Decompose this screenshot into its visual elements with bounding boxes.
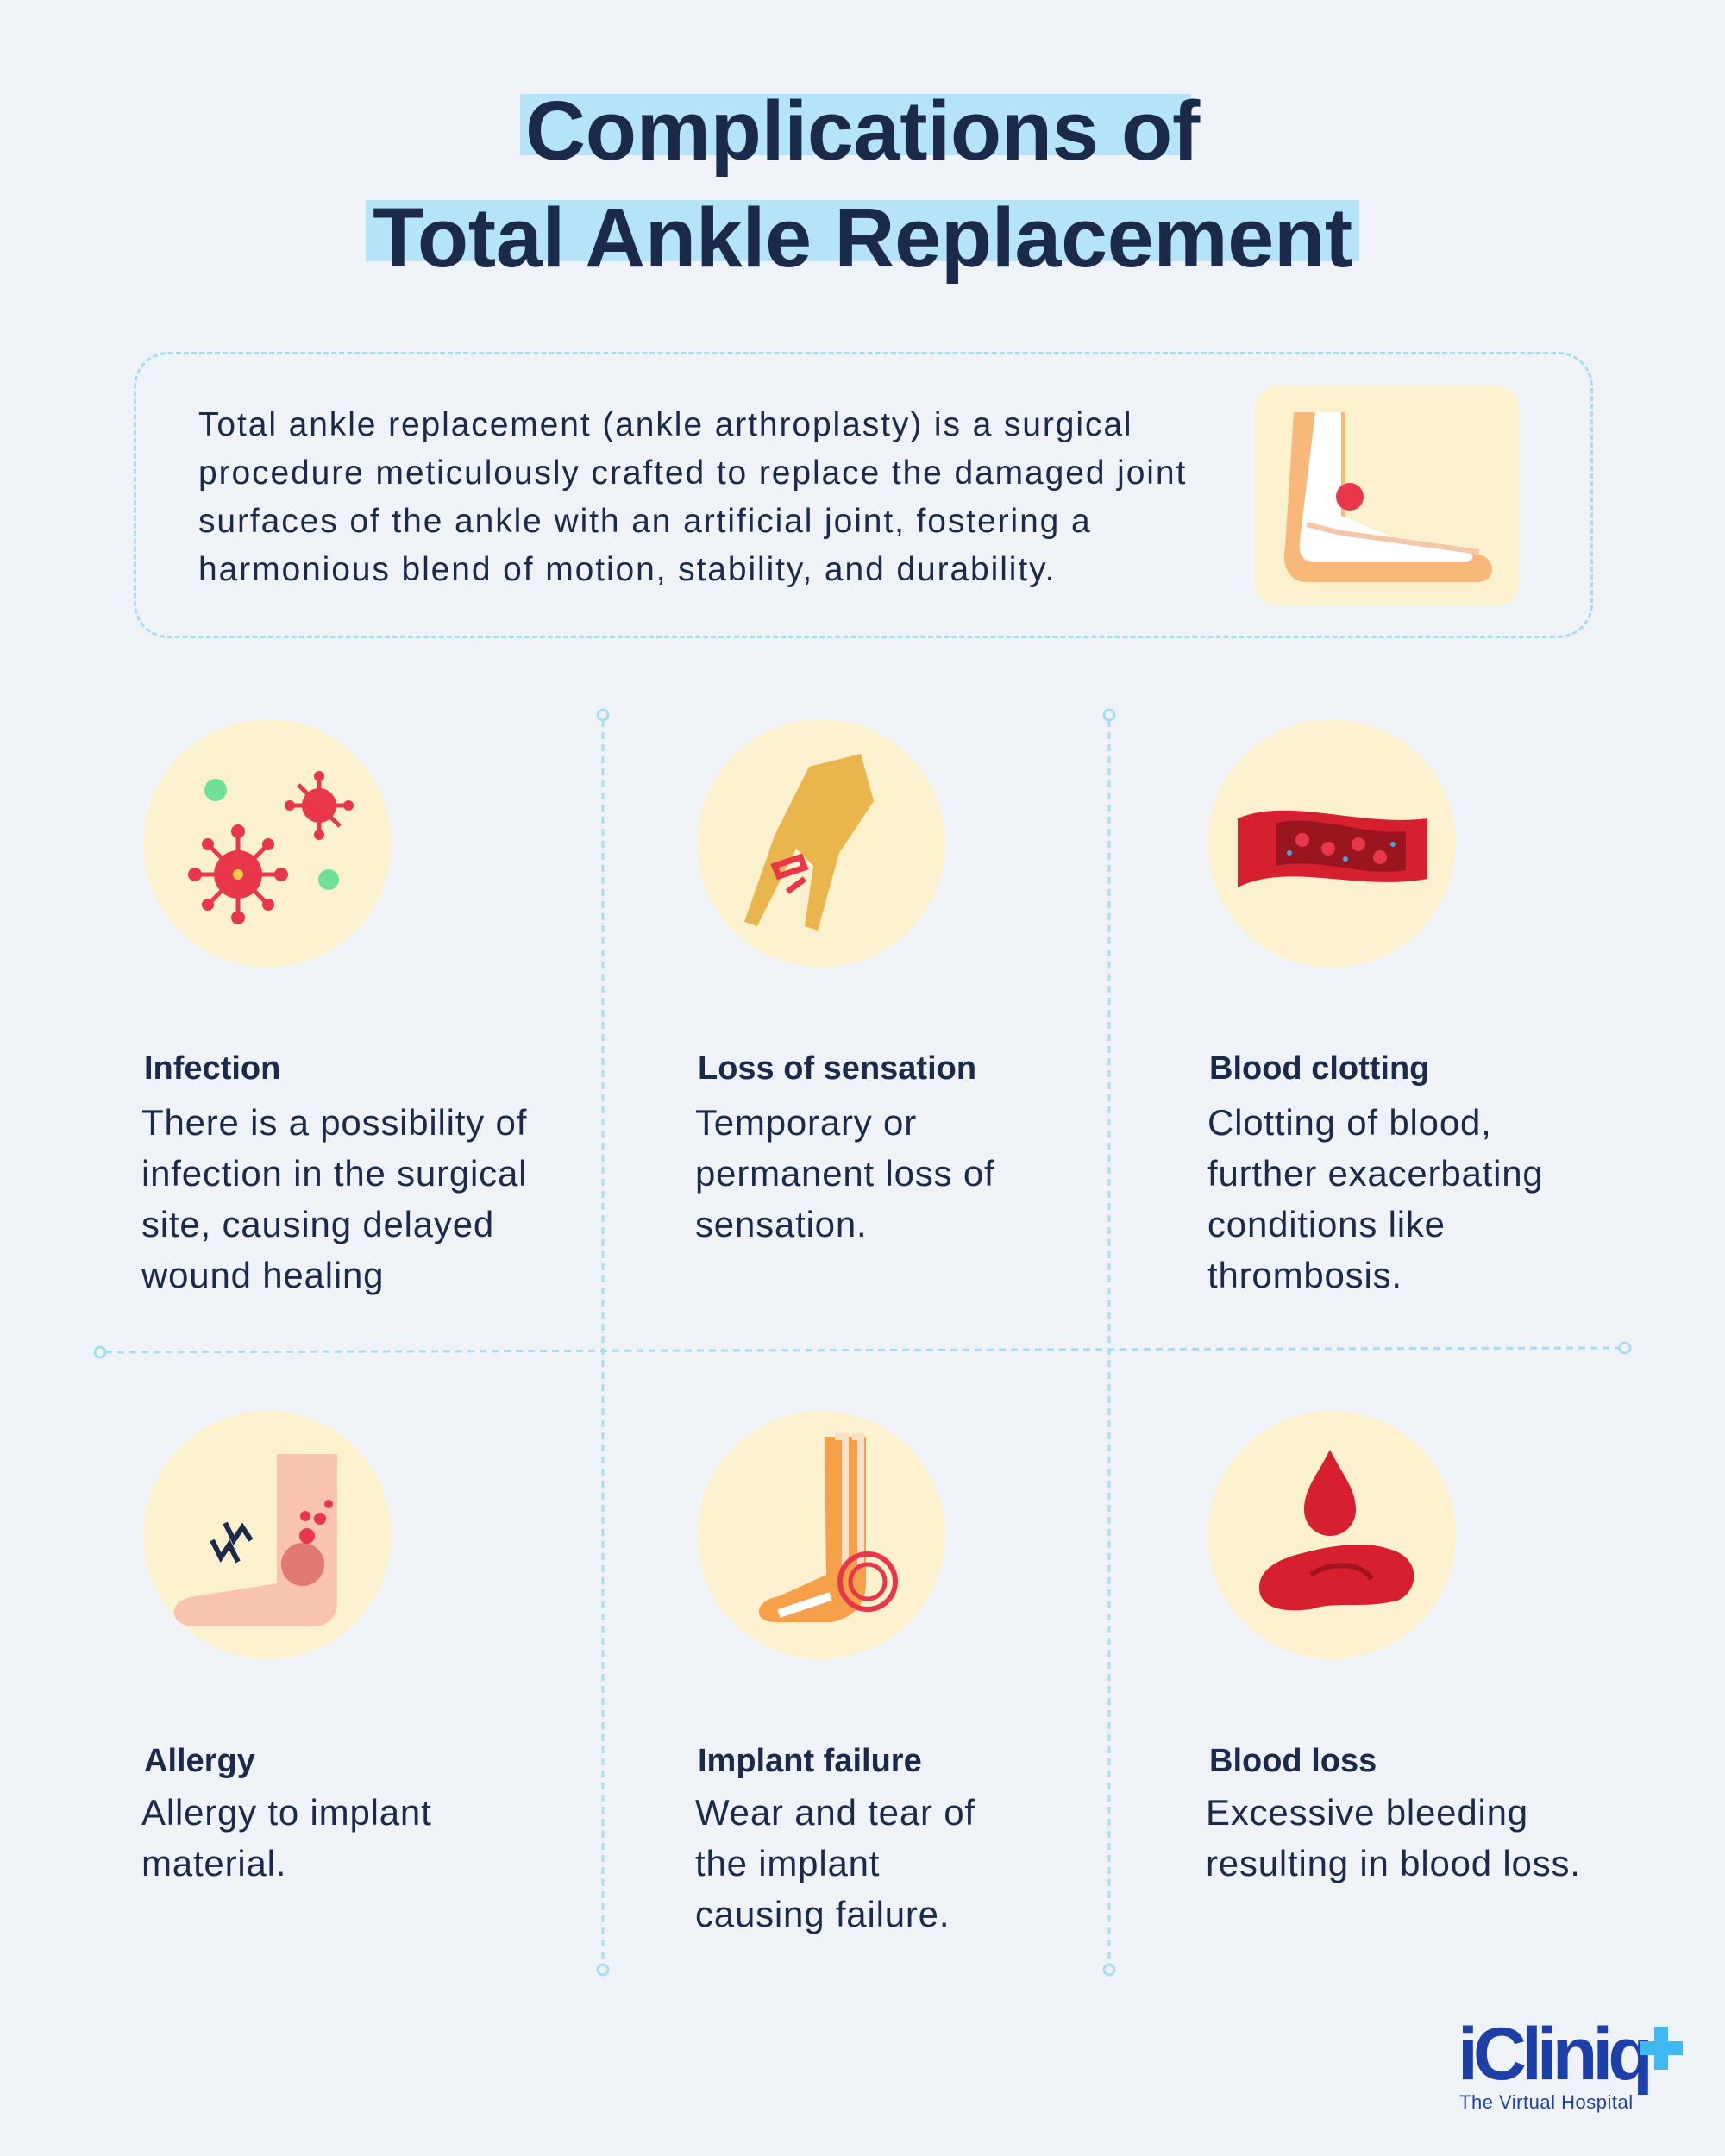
text: blood loss: Excessive bleeding: [1206, 1792, 1528, 1833]
intro text: procedure meticulously crafted to replace the damaged joint: [198, 454, 1187, 492]
heading: implant failure: Implant failure: [698, 1743, 922, 1779]
text: infection: wound healing: [141, 1255, 384, 1295]
intro text: Total ankle replacement (ankle arthroplasty) is a surgical: [198, 406, 1133, 443]
panel: allergy: [141, 1411, 432, 1883]
icon: blood drop and pool: [1208, 1411, 1456, 1659]
text: allergy: [141, 1792, 432, 1883]
text: infection: There is a possibility of: [141, 1102, 527, 1143]
text: loss of sensation: sensation.: [695, 1204, 867, 1244]
text: blood clotting: conditions like: [1208, 1204, 1446, 1244]
panel: intro: [134, 352, 1593, 638]
intro text: surfaces of the ankle with an artificial joint, fostering a: [198, 503, 1092, 540]
icon: blood vessel: [1208, 719, 1456, 968]
icon: foot with ankle point: [1255, 386, 1519, 605]
panel: blood loss: [1206, 1411, 1581, 1883]
text: implant failure: the implant: [695, 1843, 880, 1883]
title: Total Ankle Replacement: [373, 191, 1352, 285]
heading: blood loss: Blood loss: [1209, 1743, 1377, 1779]
heading: infection: Infection: [144, 1050, 280, 1087]
text: infection: site, causing delayed: [141, 1204, 494, 1244]
icon: allergic foot: [143, 1411, 392, 1659]
text: allergy: material.: [141, 1843, 286, 1883]
text: implant failure: causing failure.: [695, 1894, 950, 1934]
text: loss of sensation: [695, 1102, 994, 1244]
title: Complications of: [525, 84, 1200, 178]
heading: blood clotting: Blood clotting: [1209, 1050, 1429, 1087]
panel: infection: [141, 719, 527, 1295]
panel: implant failure: [695, 1411, 975, 1934]
icon: legs: [697, 719, 945, 968]
panel: loss of sensation: [695, 719, 994, 1244]
icon: ankle implant: [697, 1411, 945, 1659]
logo: iCliniq: [1458, 2013, 1683, 2113]
text: loss of sensation: permanent loss of: [695, 1153, 994, 1194]
logo: iCliniq: The Virtual Hospital: [1459, 2091, 1634, 2113]
text: blood clotting: Clotting of blood,: [1208, 1102, 1492, 1143]
text: blood loss: resulting in blood loss.: [1206, 1843, 1581, 1883]
text: implant failure: [695, 1792, 975, 1934]
text: blood clotting: thrombosis.: [1208, 1255, 1402, 1295]
panel: blood clotting: [1208, 719, 1544, 1295]
heading: allergy: Allergy: [144, 1743, 255, 1779]
text: blood clotting: further exacerbating: [1208, 1153, 1544, 1194]
text: implant failure: Wear and tear of: [695, 1792, 975, 1833]
title: [366, 84, 1359, 285]
intro text: [198, 406, 1187, 588]
text: infection: [141, 1102, 527, 1295]
text: infection: infection in the surgical: [141, 1153, 527, 1194]
text: blood clotting: [1208, 1102, 1544, 1295]
intro text: harmonious blend of motion, stability, and durability.: [198, 551, 1056, 588]
text: allergy: Allergy to implant: [141, 1792, 432, 1833]
text: blood loss: [1206, 1792, 1581, 1883]
logo: iCliniq: iCliniq: [1458, 2013, 1648, 2096]
text: loss of sensation: Temporary or: [695, 1102, 917, 1143]
heading: loss of sensation: Loss of sensation: [698, 1050, 976, 1087]
icon: virus: [143, 719, 392, 968]
